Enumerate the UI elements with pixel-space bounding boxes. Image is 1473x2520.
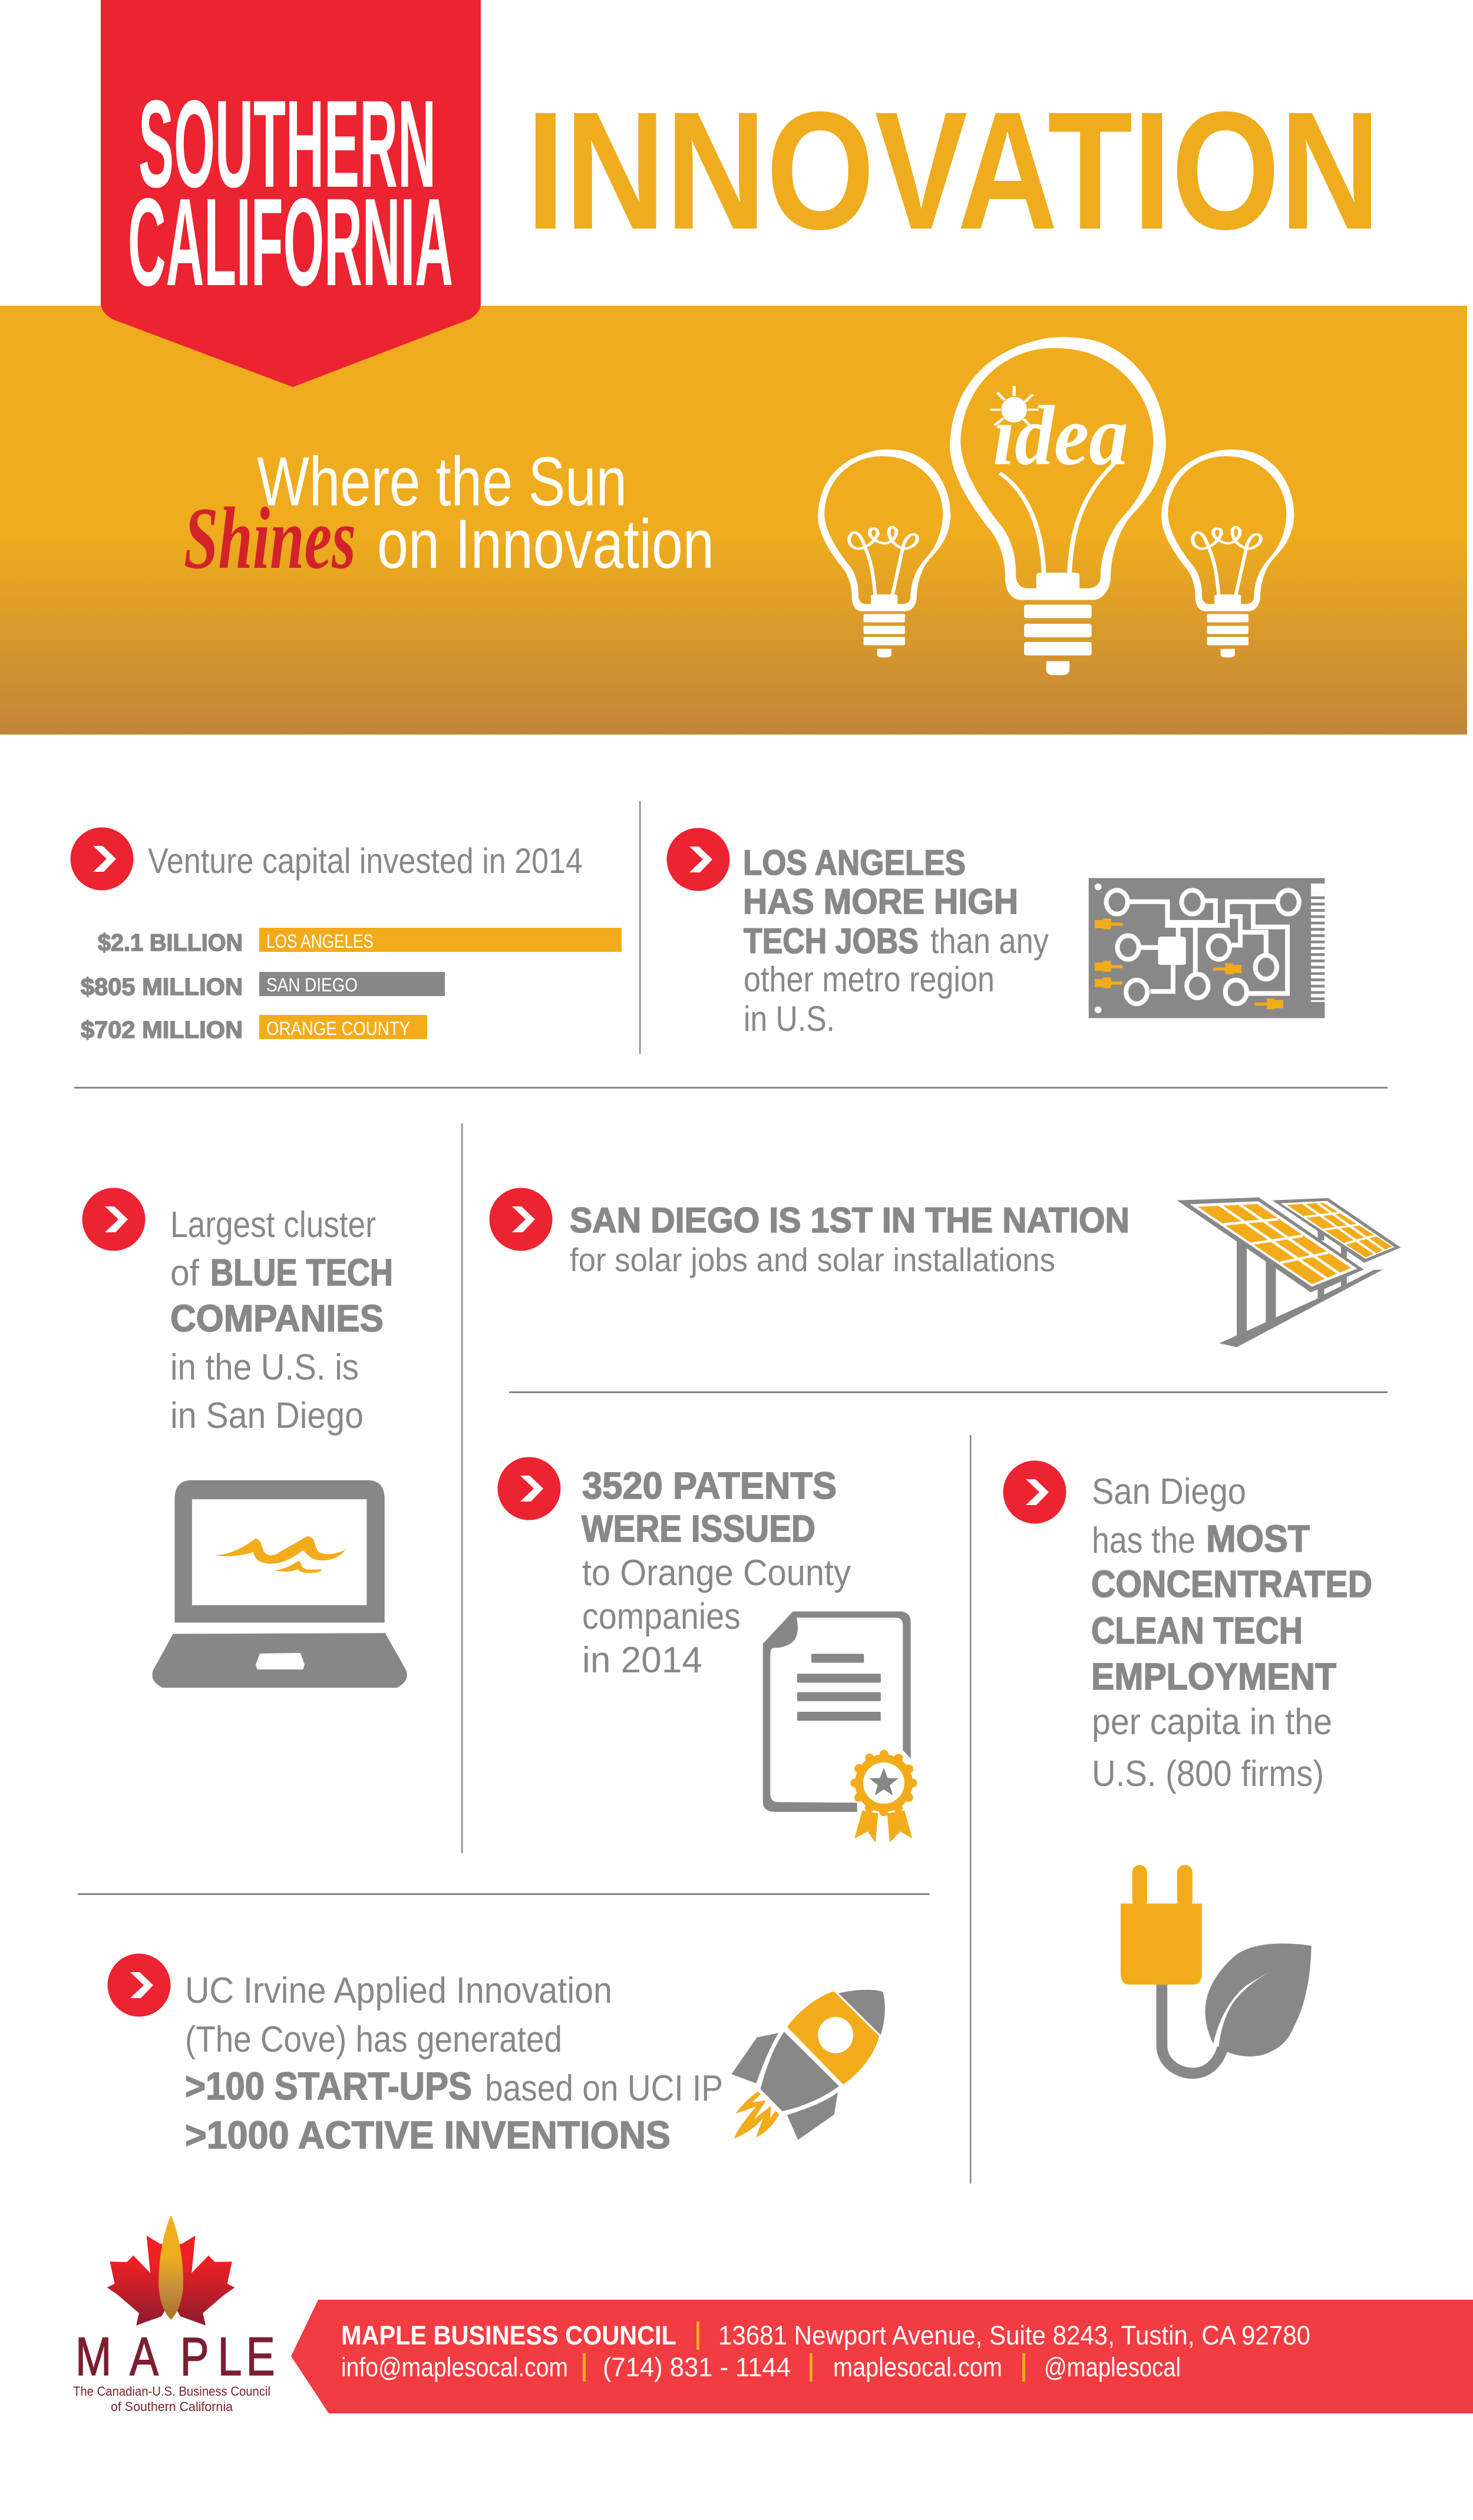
text block: Largest cluster: [170, 1205, 376, 1245]
banner: golden gradient band: [0, 306, 1467, 735]
text block: to Orange County: [582, 1553, 851, 1593]
text block: of: [170, 1253, 200, 1294]
text block: 3520 PATENTS: [582, 1464, 837, 1507]
divider lines: [74, 801, 1388, 2184]
tagline: [184, 443, 714, 587]
bar chart: ORANGE COUNTY: [266, 1018, 410, 1039]
icon: laptop: [152, 1480, 407, 1688]
text block: CONCENTRATED: [1091, 1563, 1372, 1605]
bullet icon: [71, 827, 133, 891]
bullet icon: [497, 1457, 561, 1520]
panel: blue tech: [82, 1188, 407, 1688]
text block: [185, 1970, 723, 2157]
red ribbon with title: [101, 0, 481, 387]
panel: venture capital: [71, 827, 622, 1043]
icon: center idea bulb: idea: [993, 389, 1128, 483]
heading: venture capital: Venture capital invested in 2014: [148, 841, 583, 881]
icon: three light bulbs: [818, 337, 1294, 675]
panel: UC Irvine: [107, 1953, 885, 2157]
footer contact band: [291, 2300, 1473, 2413]
text block: companies: [582, 1596, 741, 1637]
logo tagline: [73, 2384, 270, 2414]
tagline: on Innovation: [377, 505, 714, 583]
text block: other metro region: [744, 960, 995, 999]
text block: than any: [930, 921, 1049, 961]
text block: BLUE TECH: [210, 1251, 393, 1294]
footer line 2: (714) 831 - 1144: [603, 2352, 791, 2382]
text block: SAN DIEGO IS 1ST IN THE NATION: [570, 1201, 1129, 1240]
bar chart: $2.1 BILLION: [98, 929, 243, 956]
text block: based on UCI IP: [485, 2068, 723, 2109]
bullet icon: [667, 828, 729, 891]
footer line 2: [341, 2352, 1181, 2382]
icon: rocket: [731, 1990, 885, 2140]
text block: in the U.S. is: [170, 1347, 359, 1388]
text block: UC Irvine Applied Innovation: [185, 1970, 612, 2011]
bullet icon: [82, 1188, 145, 1251]
text block: [170, 1205, 393, 1436]
bullet icon: [489, 1188, 553, 1251]
text block: >100 START-UPS: [185, 2064, 472, 2108]
text block: [582, 1464, 851, 1681]
text block: in U.S.: [744, 999, 835, 1039]
bar chart: $702 MILLION: [81, 1016, 243, 1043]
logo tagline: The Canadian-U.S. Business Council: [73, 2384, 270, 2399]
text block: for solar jobs and solar installations: [570, 1241, 1055, 1278]
text: CALIFORNIA: [128, 172, 453, 312]
text block: [570, 1201, 1129, 1278]
text block: HAS MORE HIGH: [743, 882, 1018, 921]
footer line 2: maplesocal.com: [833, 2352, 1002, 2382]
panel: Los Angeles high tech jobs: [667, 828, 1325, 1039]
logo tagline: of Southern California: [111, 2399, 233, 2414]
footer line 1: [341, 2320, 1310, 2350]
text block: TECH JOBS: [744, 921, 919, 961]
bar chart: [81, 928, 622, 1043]
icon: solar panels: [1177, 1198, 1401, 1347]
text block: (The Cove) has generated: [185, 2019, 562, 2060]
text block: MOST: [1206, 1517, 1310, 1560]
icon: center idea bulb: [950, 337, 1166, 675]
panel: clean tech: [1003, 1461, 1372, 2073]
footer line 1: MAPLE BUSINESS COUNCIL: [341, 2320, 676, 2350]
text block: in San Diego: [170, 1395, 364, 1436]
icon: certificate: [763, 1612, 913, 1843]
text block: in 2014: [582, 1640, 702, 1681]
icon: right bulb: [1161, 449, 1294, 657]
logo: MAPLE: [73, 2215, 275, 2414]
text block: >1000 ACTIVE INVENTIONS: [185, 2113, 671, 2157]
tagline: Shines: [184, 490, 356, 587]
bullet icon: [1003, 1461, 1066, 1523]
bar chart: LOS ANGELES: [266, 931, 374, 952]
footer line 1: 13681 Newport Avenue, Suite 8243, Tustin, CA 92780: [718, 2320, 1310, 2350]
icon: plug and leaf: [1121, 1865, 1312, 2073]
text: SOUTHERN: [138, 74, 436, 213]
text block: has the: [1092, 1520, 1195, 1561]
text block: WERE ISSUED: [582, 1507, 815, 1550]
tagline: Where the Sun: [257, 443, 627, 521]
footer line 2: info@maplesocal.com: [341, 2352, 568, 2382]
text block: [743, 843, 1049, 1039]
text block: LOS ANGELES: [743, 843, 966, 882]
text block: [1091, 1471, 1372, 1794]
text block: San Diego: [1092, 1471, 1246, 1512]
text block: CLEAN TECH: [1091, 1609, 1303, 1652]
text block: EMPLOYMENT: [1091, 1655, 1336, 1698]
logo wordmark: MAPLE: [75, 2326, 275, 2387]
text block: COMPANIES: [170, 1297, 384, 1340]
text block: U.S. (800 firms): [1092, 1754, 1324, 1794]
text block: per capita in the: [1092, 1702, 1332, 1742]
panel: San Diego solar: [489, 1188, 1401, 1347]
bullet icon: [107, 1953, 171, 2017]
footer line 2: @maplesocal: [1044, 2352, 1181, 2382]
bar chart: SAN DIEGO: [266, 974, 358, 996]
panel: patents: [497, 1457, 913, 1843]
bar chart: $805 MILLION: [81, 973, 243, 1000]
icon: left bulb: [818, 449, 950, 657]
icon: maple leaf with surfboard: [107, 2215, 235, 2326]
icon: circuit board: [1089, 878, 1325, 1018]
